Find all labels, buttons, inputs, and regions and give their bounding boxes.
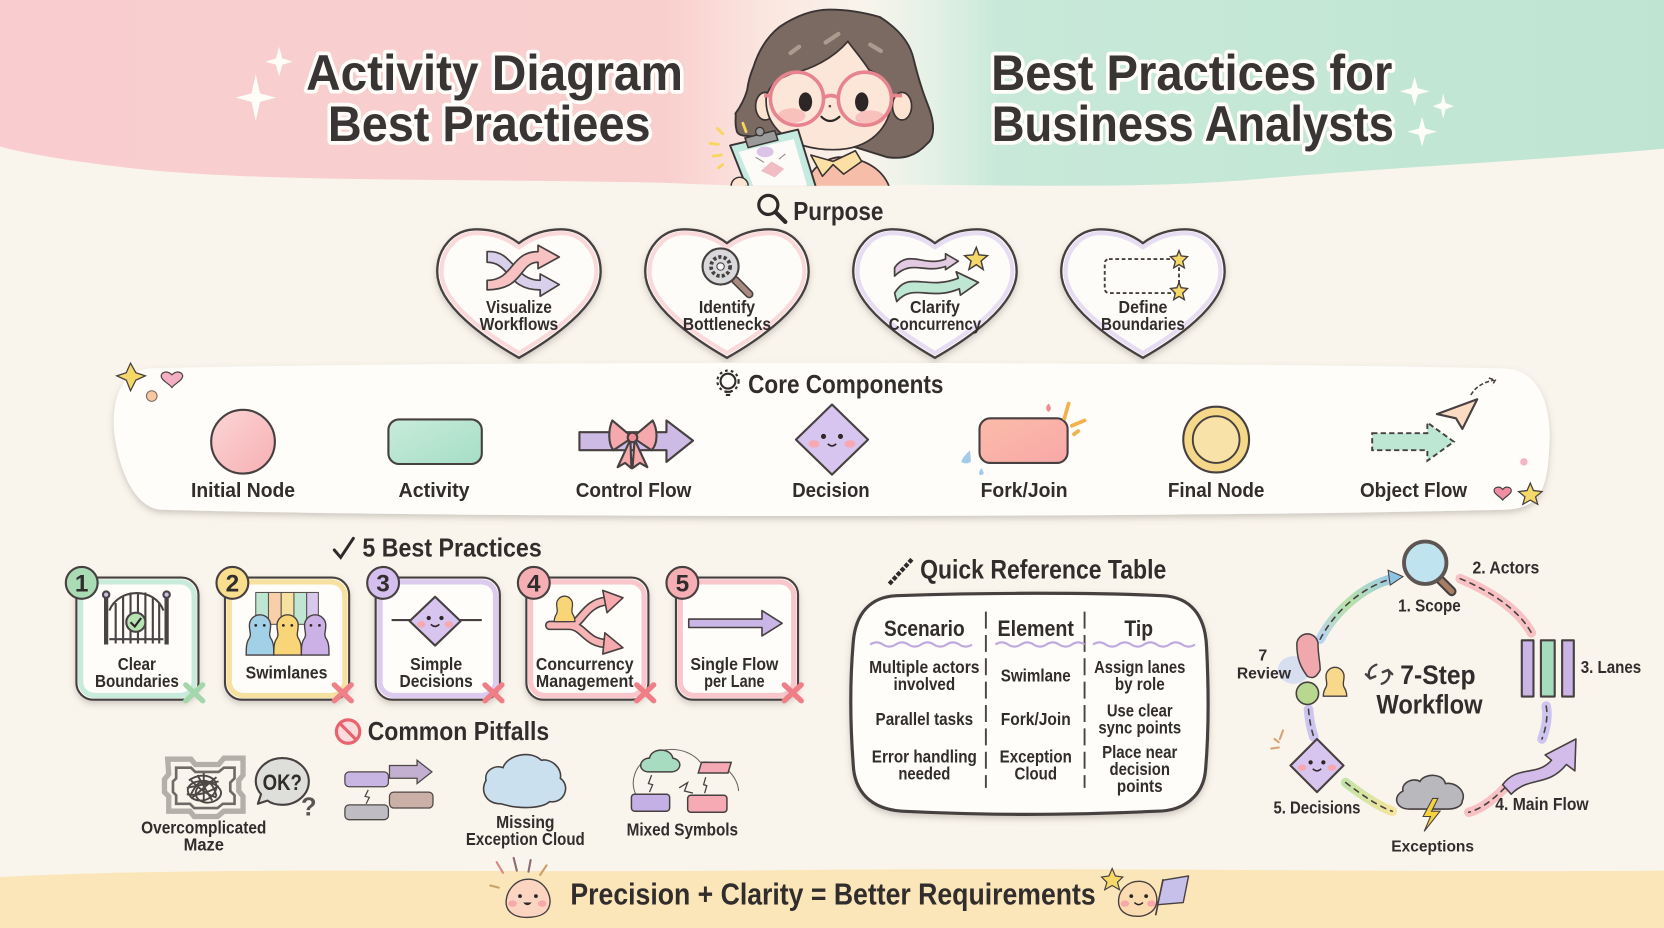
hand bbox=[730, 176, 749, 186]
panel: purpose hearts bbox=[437, 229, 1225, 358]
component: final node: Final Node bbox=[1168, 480, 1264, 502]
heading: 5 best practices: 5 Best Practices bbox=[362, 534, 542, 562]
panel background bbox=[114, 363, 1550, 516]
card 3: simple decisions: Simple bbox=[410, 654, 462, 674]
panel: best practices bbox=[66, 567, 801, 701]
column headers bbox=[884, 616, 1153, 641]
icon: lanes and people bbox=[246, 592, 329, 655]
step 7: review bbox=[1237, 634, 1347, 704]
card 3: simple decisions bbox=[367, 567, 502, 701]
card 5: single flow per lane: 5 bbox=[676, 570, 689, 597]
step 7: review: Review bbox=[1237, 665, 1292, 682]
component: object flow bbox=[1360, 378, 1495, 502]
component: decision bbox=[792, 405, 870, 502]
card 5: single flow per lane: per Lane bbox=[704, 671, 765, 691]
footer message bbox=[490, 858, 1189, 917]
card 2: swimlanes: 2 bbox=[226, 570, 239, 597]
row 1: involved bbox=[894, 674, 955, 694]
pitfall: overcomplicated maze: Maze bbox=[184, 834, 224, 854]
panel: quick reference table bbox=[851, 593, 1208, 814]
card: define boundaries bbox=[1061, 229, 1225, 358]
card: identify bottlenecks bbox=[645, 229, 809, 358]
card: clarify concurrency: Concurrency bbox=[889, 314, 981, 334]
step 2: actors: 2. Actors bbox=[1472, 557, 1540, 577]
row 3: Error handling bbox=[872, 746, 977, 766]
header band bbox=[0, 0, 1664, 187]
icon: check bbox=[334, 538, 353, 557]
card: clarify concurrency bbox=[853, 229, 1017, 358]
step 3: lanes: 3. Lanes bbox=[1581, 657, 1641, 677]
blush bbox=[778, 108, 805, 123]
nose and mouth bbox=[829, 105, 831, 107]
icon: fork arrows bbox=[550, 590, 623, 654]
heading: Purpose: Purpose bbox=[793, 198, 883, 226]
component: initial node bbox=[191, 410, 295, 502]
hair shine bbox=[791, 34, 881, 53]
row 2: Parallel tasks bbox=[876, 709, 973, 729]
icon: excited face bbox=[490, 858, 550, 917]
icon: dashed box and stars bbox=[1105, 251, 1188, 300]
title left: Activity Diagram bbox=[306, 45, 683, 101]
step 3: lanes bbox=[1522, 640, 1641, 697]
step 1: scope bbox=[1398, 542, 1461, 616]
pitfall: mixed symbols: Mixed Symbols bbox=[627, 820, 738, 840]
step: exceptions: Exceptions bbox=[1391, 839, 1474, 856]
icon: wavy arrows and star bbox=[895, 247, 987, 302]
sparkles right bbox=[1400, 76, 1454, 147]
icon: magnifier bbox=[759, 195, 785, 222]
card 5: single flow per lane: Single Flow bbox=[690, 654, 779, 674]
pitfall: disconnected shapes bbox=[345, 760, 433, 820]
row 2: Use clear bbox=[1107, 701, 1173, 721]
component: final node bbox=[1168, 407, 1264, 502]
panel: core components bbox=[114, 363, 1550, 516]
pitfall: overcomplicated maze: Overcomplicated bbox=[141, 817, 266, 838]
hair bbox=[735, 10, 933, 158]
pitfall: missing exception cloud: Exception Cloud bbox=[466, 829, 585, 849]
step 1: scope: 1. Scope bbox=[1398, 596, 1461, 616]
panel: 7-step workflow bbox=[1237, 542, 1641, 856]
table frame bbox=[851, 593, 1208, 814]
icon: maze bbox=[164, 758, 243, 817]
card 3: simple decisions: 3 bbox=[376, 570, 390, 597]
heading: quick reference table: Quick Reference Table bbox=[920, 555, 1166, 585]
face bbox=[766, 41, 891, 150]
card: clarify concurrency: Clarify bbox=[910, 297, 960, 317]
clipboard bbox=[730, 127, 817, 191]
card 1: clear boundaries: Boundaries bbox=[95, 671, 179, 691]
title right bbox=[991, 45, 1394, 152]
ears bbox=[754, 92, 770, 121]
column headers: Element bbox=[998, 616, 1074, 641]
icon: diamond bbox=[392, 597, 482, 646]
title right: Best Practices for bbox=[991, 45, 1392, 101]
heading: workflow title: Workflow bbox=[1376, 690, 1483, 720]
card 4: concurrency management: 4 bbox=[527, 570, 541, 597]
component: fork/join: Fork/Join bbox=[981, 480, 1068, 502]
component: fork/join bbox=[961, 403, 1085, 502]
icon: pencil bbox=[889, 558, 913, 584]
sparkles left bbox=[236, 47, 293, 121]
heading: core components: Core Components bbox=[748, 371, 943, 399]
card 1: clear boundaries: 1 bbox=[75, 570, 89, 597]
eyes bbox=[799, 92, 812, 111]
component: control flow: Control Flow bbox=[576, 480, 692, 502]
pitfall: missing exception cloud: Missing bbox=[496, 812, 554, 832]
row 1: Swimlane bbox=[1001, 666, 1071, 686]
heading: workflow title: 7-Step bbox=[1400, 660, 1476, 690]
step 7: review: 7 bbox=[1258, 647, 1267, 664]
card 3: simple decisions: Decisions bbox=[400, 671, 473, 691]
icon: magnifier with gear bbox=[703, 248, 749, 294]
icon: OK bubble: ? bbox=[301, 793, 317, 821]
column headers: Tip bbox=[1124, 616, 1153, 641]
icon: arrow bbox=[689, 611, 782, 636]
icon: gear bulb bbox=[717, 371, 739, 395]
row 3: Exception bbox=[1000, 746, 1072, 766]
icon: crossing arrows bbox=[487, 245, 559, 296]
column dividers bbox=[986, 612, 1085, 788]
card: identify bottlenecks: Bottlenecks bbox=[683, 314, 771, 334]
card: define boundaries: Boundaries bbox=[1101, 314, 1185, 334]
component: control flow bbox=[576, 420, 693, 502]
card: visualize workflows bbox=[437, 229, 601, 358]
card: visualize workflows: Visualize bbox=[486, 297, 552, 317]
pitfall: missing exception cloud bbox=[466, 755, 585, 849]
component: initial node: Initial Node bbox=[191, 480, 295, 502]
component: activity: Activity bbox=[398, 480, 470, 502]
icon: happy face with flag bbox=[1102, 869, 1189, 916]
row 3: Cloud bbox=[1015, 763, 1057, 783]
step: exceptions bbox=[1391, 775, 1474, 856]
card 4: concurrency management: Management bbox=[536, 671, 634, 691]
row 2: Fork/Join bbox=[1001, 709, 1071, 729]
step 4: main flow bbox=[1495, 739, 1589, 814]
row 1 bbox=[869, 657, 1186, 694]
row 1: Assign lanes bbox=[1094, 657, 1186, 677]
collar bbox=[811, 151, 862, 176]
heading: Purpose bbox=[759, 195, 883, 226]
component: activity bbox=[388, 419, 482, 502]
header underlines bbox=[870, 642, 1195, 647]
blouse bbox=[807, 157, 889, 187]
card 1: clear boundaries: Clear bbox=[118, 654, 156, 674]
card: identify bottlenecks: Identify bbox=[699, 297, 755, 317]
icon: prohibited bbox=[336, 720, 360, 743]
heading: common pitfalls: Common Pitfalls bbox=[368, 718, 549, 746]
title left bbox=[306, 45, 683, 152]
decoration: heart and star bbox=[1494, 458, 1542, 504]
heading: workflow title bbox=[1366, 660, 1483, 720]
step 5: decisions: 5. Decisions bbox=[1273, 797, 1361, 817]
icon: OK bubble bbox=[256, 758, 317, 821]
icon: OK bubble: OK? bbox=[263, 770, 302, 795]
row 2: sync points bbox=[1098, 718, 1181, 738]
character: analyst with clipboard bbox=[710, 10, 933, 194]
column headers: Scenario bbox=[884, 616, 965, 641]
title left: Best Practiees bbox=[328, 96, 651, 152]
icon: gate bbox=[103, 591, 170, 645]
card: visualize workflows: Workflows bbox=[480, 314, 558, 334]
card 2: swimlanes bbox=[216, 567, 351, 701]
card 4: concurrency management: Concurrency bbox=[536, 654, 634, 674]
row 3 bbox=[872, 742, 1178, 796]
row 3: Place near bbox=[1102, 742, 1178, 762]
panel: common pitfalls bbox=[141, 749, 739, 854]
card 2: swimlanes: Swimlanes bbox=[246, 662, 328, 682]
card: define boundaries: Define bbox=[1119, 297, 1168, 317]
row 1: by role bbox=[1115, 674, 1165, 694]
footer band bbox=[0, 869, 1664, 928]
component: decision: Decision bbox=[792, 480, 870, 502]
pitfall: overcomplicated maze bbox=[141, 758, 317, 854]
row 3: needed bbox=[898, 763, 950, 783]
card 5: single flow per lane bbox=[666, 567, 801, 701]
row 3: decision bbox=[1110, 759, 1170, 779]
decoration: star and heart bbox=[117, 363, 183, 401]
card 1: clear boundaries bbox=[66, 567, 203, 701]
ring segments bbox=[1308, 570, 1547, 812]
step 4: main flow: 4. Main Flow bbox=[1495, 794, 1589, 814]
clipboard glow bbox=[710, 123, 746, 168]
title right: Business Analysts bbox=[992, 96, 1394, 152]
pitfall: mixed symbols bbox=[627, 749, 739, 840]
row 2 bbox=[876, 701, 1181, 738]
card 4: concurrency management bbox=[518, 567, 654, 701]
step 5: decisions bbox=[1271, 731, 1361, 817]
footer message: Precision + Clarity = Better Requirements bbox=[570, 877, 1096, 912]
row 1: Multiple actors bbox=[869, 657, 980, 677]
component: object flow: Object Flow bbox=[1360, 480, 1467, 502]
glasses bbox=[764, 72, 902, 125]
row 3: points bbox=[1117, 776, 1163, 796]
